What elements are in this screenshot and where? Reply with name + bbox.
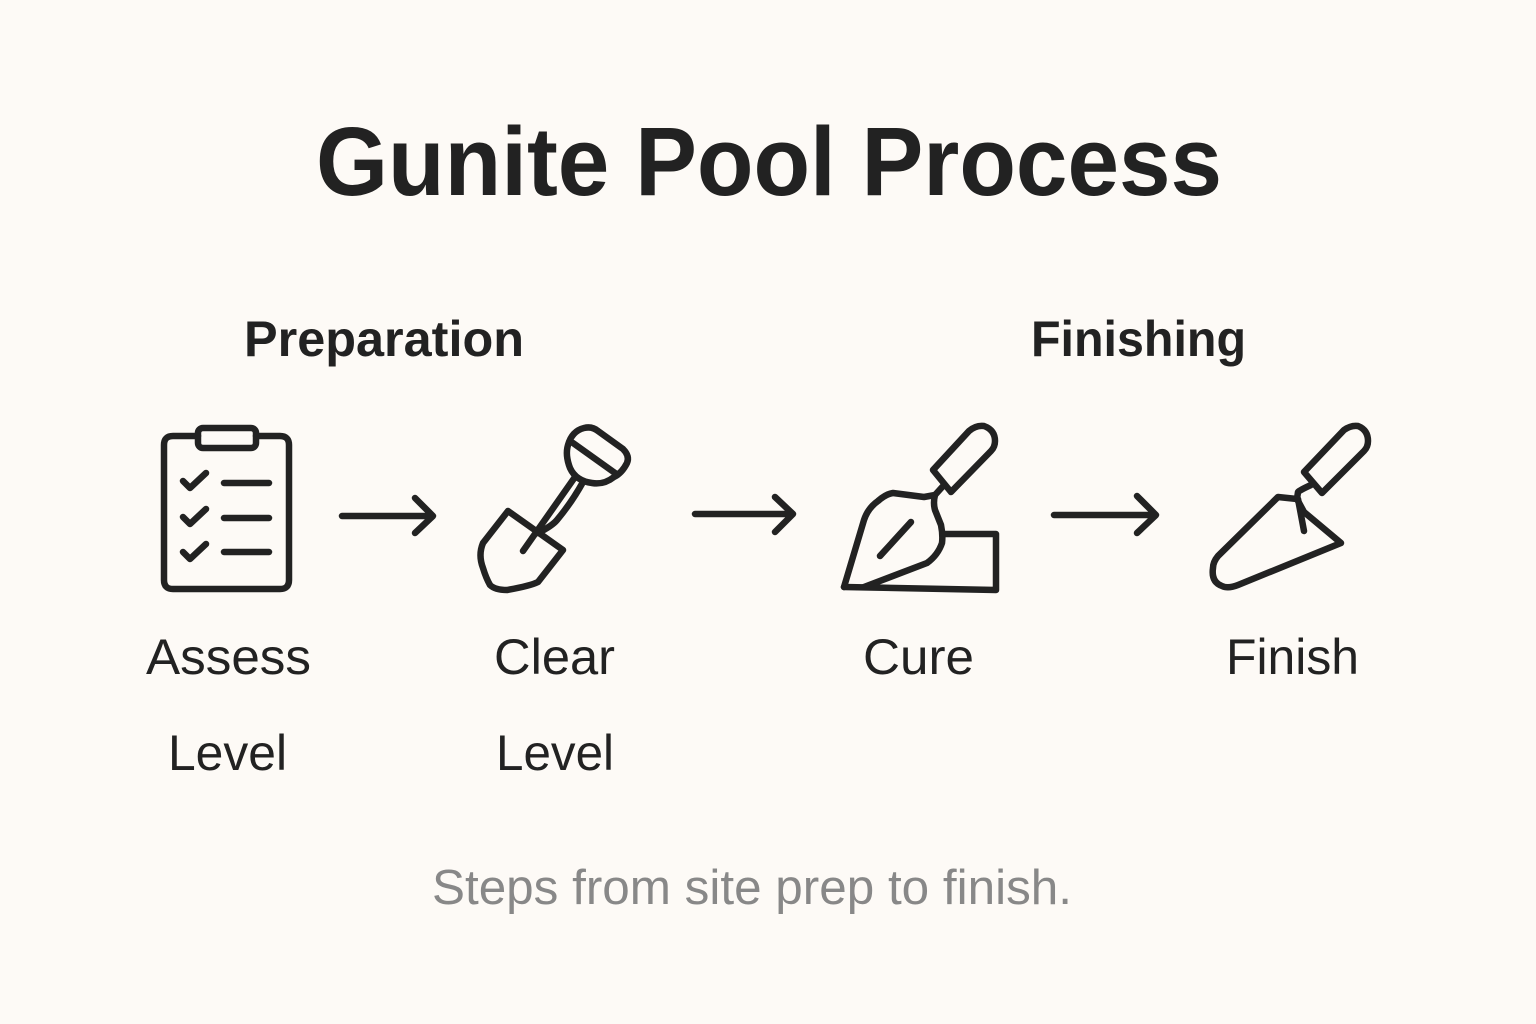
icon: clipboard checklist xyxy=(164,428,289,589)
title: Gunite Pool Process xyxy=(316,107,1222,216)
icon: finishing trowel xyxy=(1213,426,1368,587)
icon: shovel xyxy=(480,427,628,590)
heading: preparation: Preparation xyxy=(244,311,524,367)
step label: finish: Finish xyxy=(1226,629,1359,685)
step label: level under assess: Level xyxy=(168,725,287,781)
arrow: assess to clear xyxy=(342,498,433,533)
icon: cure trowel on slab xyxy=(844,426,996,590)
heading: finishing: Finishing xyxy=(1031,311,1246,367)
caption: Steps from site prep to finish. xyxy=(432,861,1072,915)
step label: cure: Cure xyxy=(863,629,974,685)
step label: clear: Clear xyxy=(494,629,615,685)
arrow: cure to finish xyxy=(1054,496,1156,533)
step label: level under clear: Level xyxy=(496,725,614,781)
arrow: clear to cure xyxy=(695,497,793,532)
step label: assess: Assess xyxy=(146,629,311,685)
